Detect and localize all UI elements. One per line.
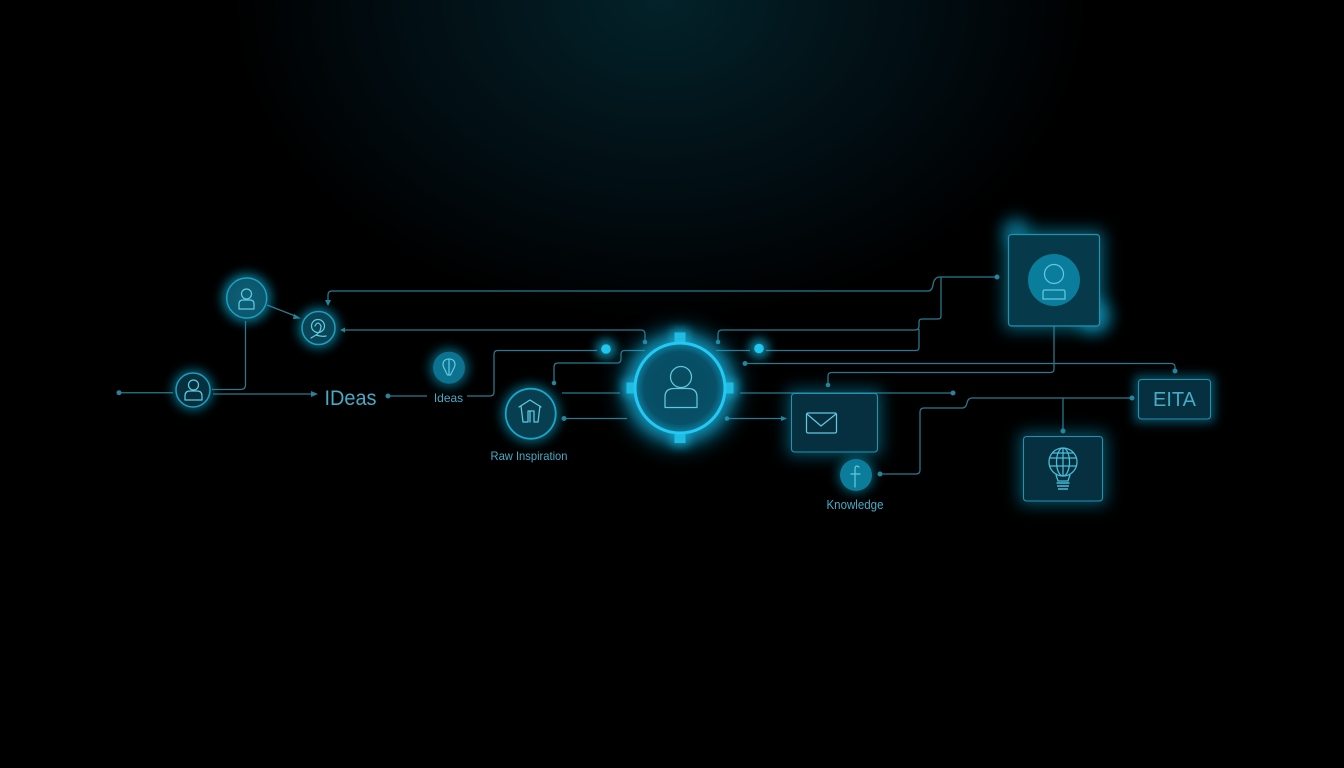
icon: f glyph bbox=[851, 466, 860, 487]
node: person top left bbox=[222, 273, 272, 323]
label: Raw Inspiration: Raw Inspiration bbox=[490, 449, 568, 463]
connector lines bbox=[119, 277, 1175, 474]
icon: envelope bbox=[806, 413, 836, 433]
icon: house bbox=[519, 400, 541, 422]
connector end dots and arrowheads bbox=[116, 274, 1178, 476]
icon: person bbox=[1043, 264, 1065, 299]
hub tabs bbox=[626, 332, 734, 443]
icon: balloon bbox=[443, 359, 455, 375]
icon: person bbox=[665, 366, 697, 408]
node: person swirl bbox=[298, 307, 340, 349]
panel: envelope bbox=[787, 389, 882, 456]
label: IDeas: IDeas bbox=[324, 386, 376, 410]
central hub bbox=[618, 326, 742, 450]
panel: globe bulb bbox=[1019, 432, 1107, 505]
node: raw inspiration bbox=[501, 384, 561, 444]
icon: swirl bbox=[311, 320, 326, 338]
node: person left bbox=[172, 369, 214, 411]
node: balloon idea bbox=[429, 348, 469, 388]
node: knowledge bbox=[837, 456, 875, 494]
glowing junction dot left bbox=[596, 339, 616, 359]
label: Ideas small: Ideas bbox=[434, 391, 463, 405]
icon: person bbox=[185, 380, 202, 400]
icon: globe lightbulb bbox=[1049, 448, 1077, 489]
panel: top right profile bbox=[1003, 217, 1111, 333]
label: EITA: EITA bbox=[1153, 389, 1197, 411]
label: Knowledge: Knowledge bbox=[826, 498, 884, 512]
glowing junction dot right bbox=[749, 338, 769, 358]
icon: person bbox=[239, 289, 254, 309]
panel: EITA bbox=[1134, 375, 1215, 423]
